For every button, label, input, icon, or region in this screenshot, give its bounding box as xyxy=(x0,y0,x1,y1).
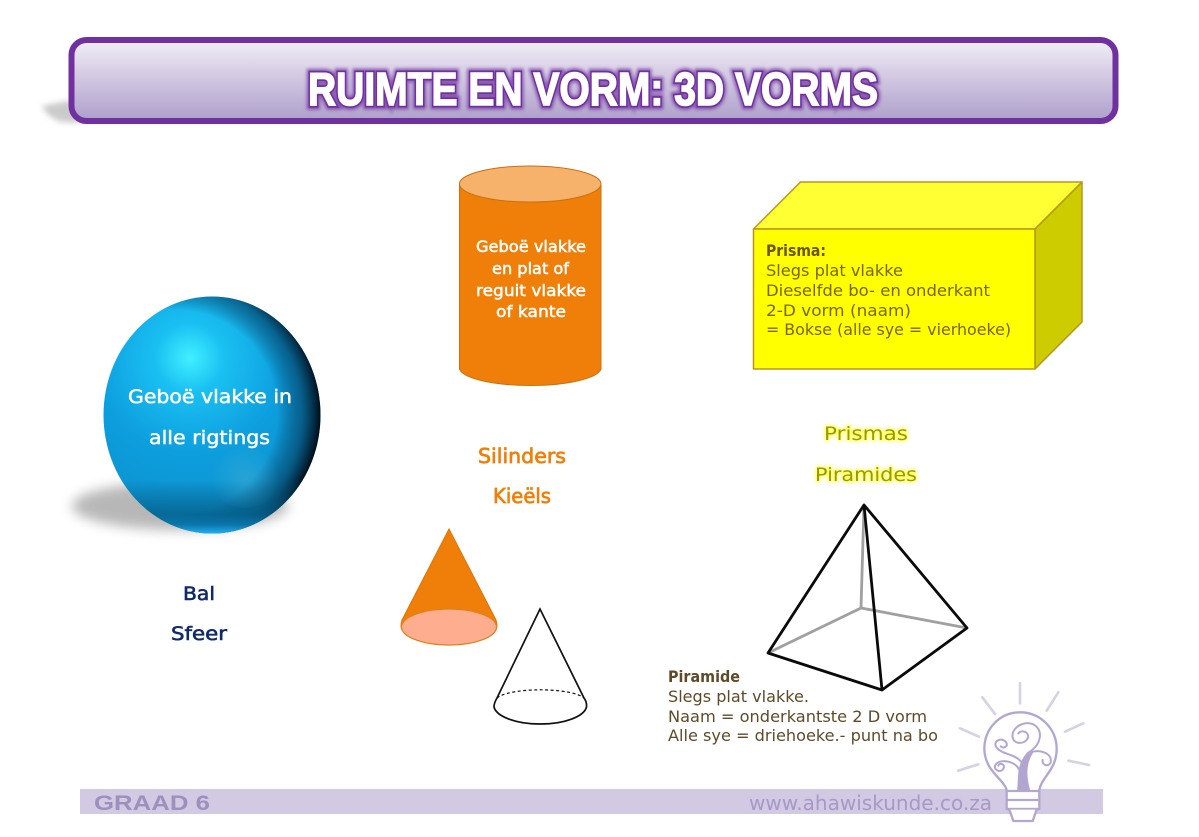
footer bar xyxy=(80,789,1103,815)
outline cone xyxy=(494,609,587,724)
label: Bal / Sfeer: Bal xyxy=(183,583,215,605)
pyramid text: Slegs plat vlakke. xyxy=(668,687,809,706)
cylinder text: en plat of xyxy=(492,259,569,278)
prism text: = Bokse (alle sye = vierhoeke) xyxy=(766,320,1011,339)
pyramid text: Naam = onderkantste 2 D vorm xyxy=(668,707,927,726)
title text: RUIMTE EN VORM: 3D VORMS xyxy=(308,63,878,115)
label: Prismas / Piramides xyxy=(815,423,917,486)
prism text: Prisma: xyxy=(766,241,826,260)
cylinder text: Geboë vlakke xyxy=(476,237,586,256)
sphere xyxy=(72,296,320,534)
cylinder text: of kante xyxy=(496,302,566,321)
cylinder text xyxy=(476,237,586,321)
prism text xyxy=(766,241,1011,339)
label: Bal / Sfeer xyxy=(171,583,227,645)
website: www.ahawiskunde.co.za xyxy=(749,791,992,815)
title banner xyxy=(42,40,1116,123)
label: Prismas / Piramides: Piramides xyxy=(815,464,917,486)
label: Prismas / Piramides: Piramides xyxy=(815,464,917,486)
title text: RUIMTE EN VORM: 3D VORMS xyxy=(308,63,878,115)
sphere text: Geboë vlakke in xyxy=(128,386,292,408)
pyramid text: Piramide xyxy=(668,667,740,686)
grade label: GRAAD 6 xyxy=(94,792,210,815)
cylinder text: reguit vlakke xyxy=(476,281,586,300)
icon: light bulb logo xyxy=(958,683,1089,821)
cylinder xyxy=(459,166,601,385)
label: Prismas / Piramides: Prismas xyxy=(824,423,908,445)
sphere text: alle rigtings xyxy=(149,427,270,449)
pyramid xyxy=(768,505,967,690)
pyramid text xyxy=(668,667,938,745)
prism text: Slegs plat vlakke xyxy=(766,261,903,280)
yellow prism box xyxy=(754,182,1082,369)
title text: RUIMTE EN VORM: 3D VORMS xyxy=(308,63,878,115)
label: Silinders / Kieëls: Kieëls xyxy=(493,484,551,508)
label: Bal / Sfeer: Sfeer xyxy=(171,623,227,645)
orange cone xyxy=(401,529,497,645)
label: Silinders / Kieëls: Silinders xyxy=(478,444,566,468)
prism text: 2-D vorm (naam) xyxy=(766,301,911,320)
pyramid text: Alle sye = driehoeke.- punt na bo xyxy=(668,726,938,745)
label: Silinders / Kieëls xyxy=(478,444,566,508)
label: Prismas / Piramides: Prismas xyxy=(824,423,908,445)
sphere text xyxy=(128,386,292,449)
prism text: Dieselfde bo- en onderkant xyxy=(766,281,990,300)
